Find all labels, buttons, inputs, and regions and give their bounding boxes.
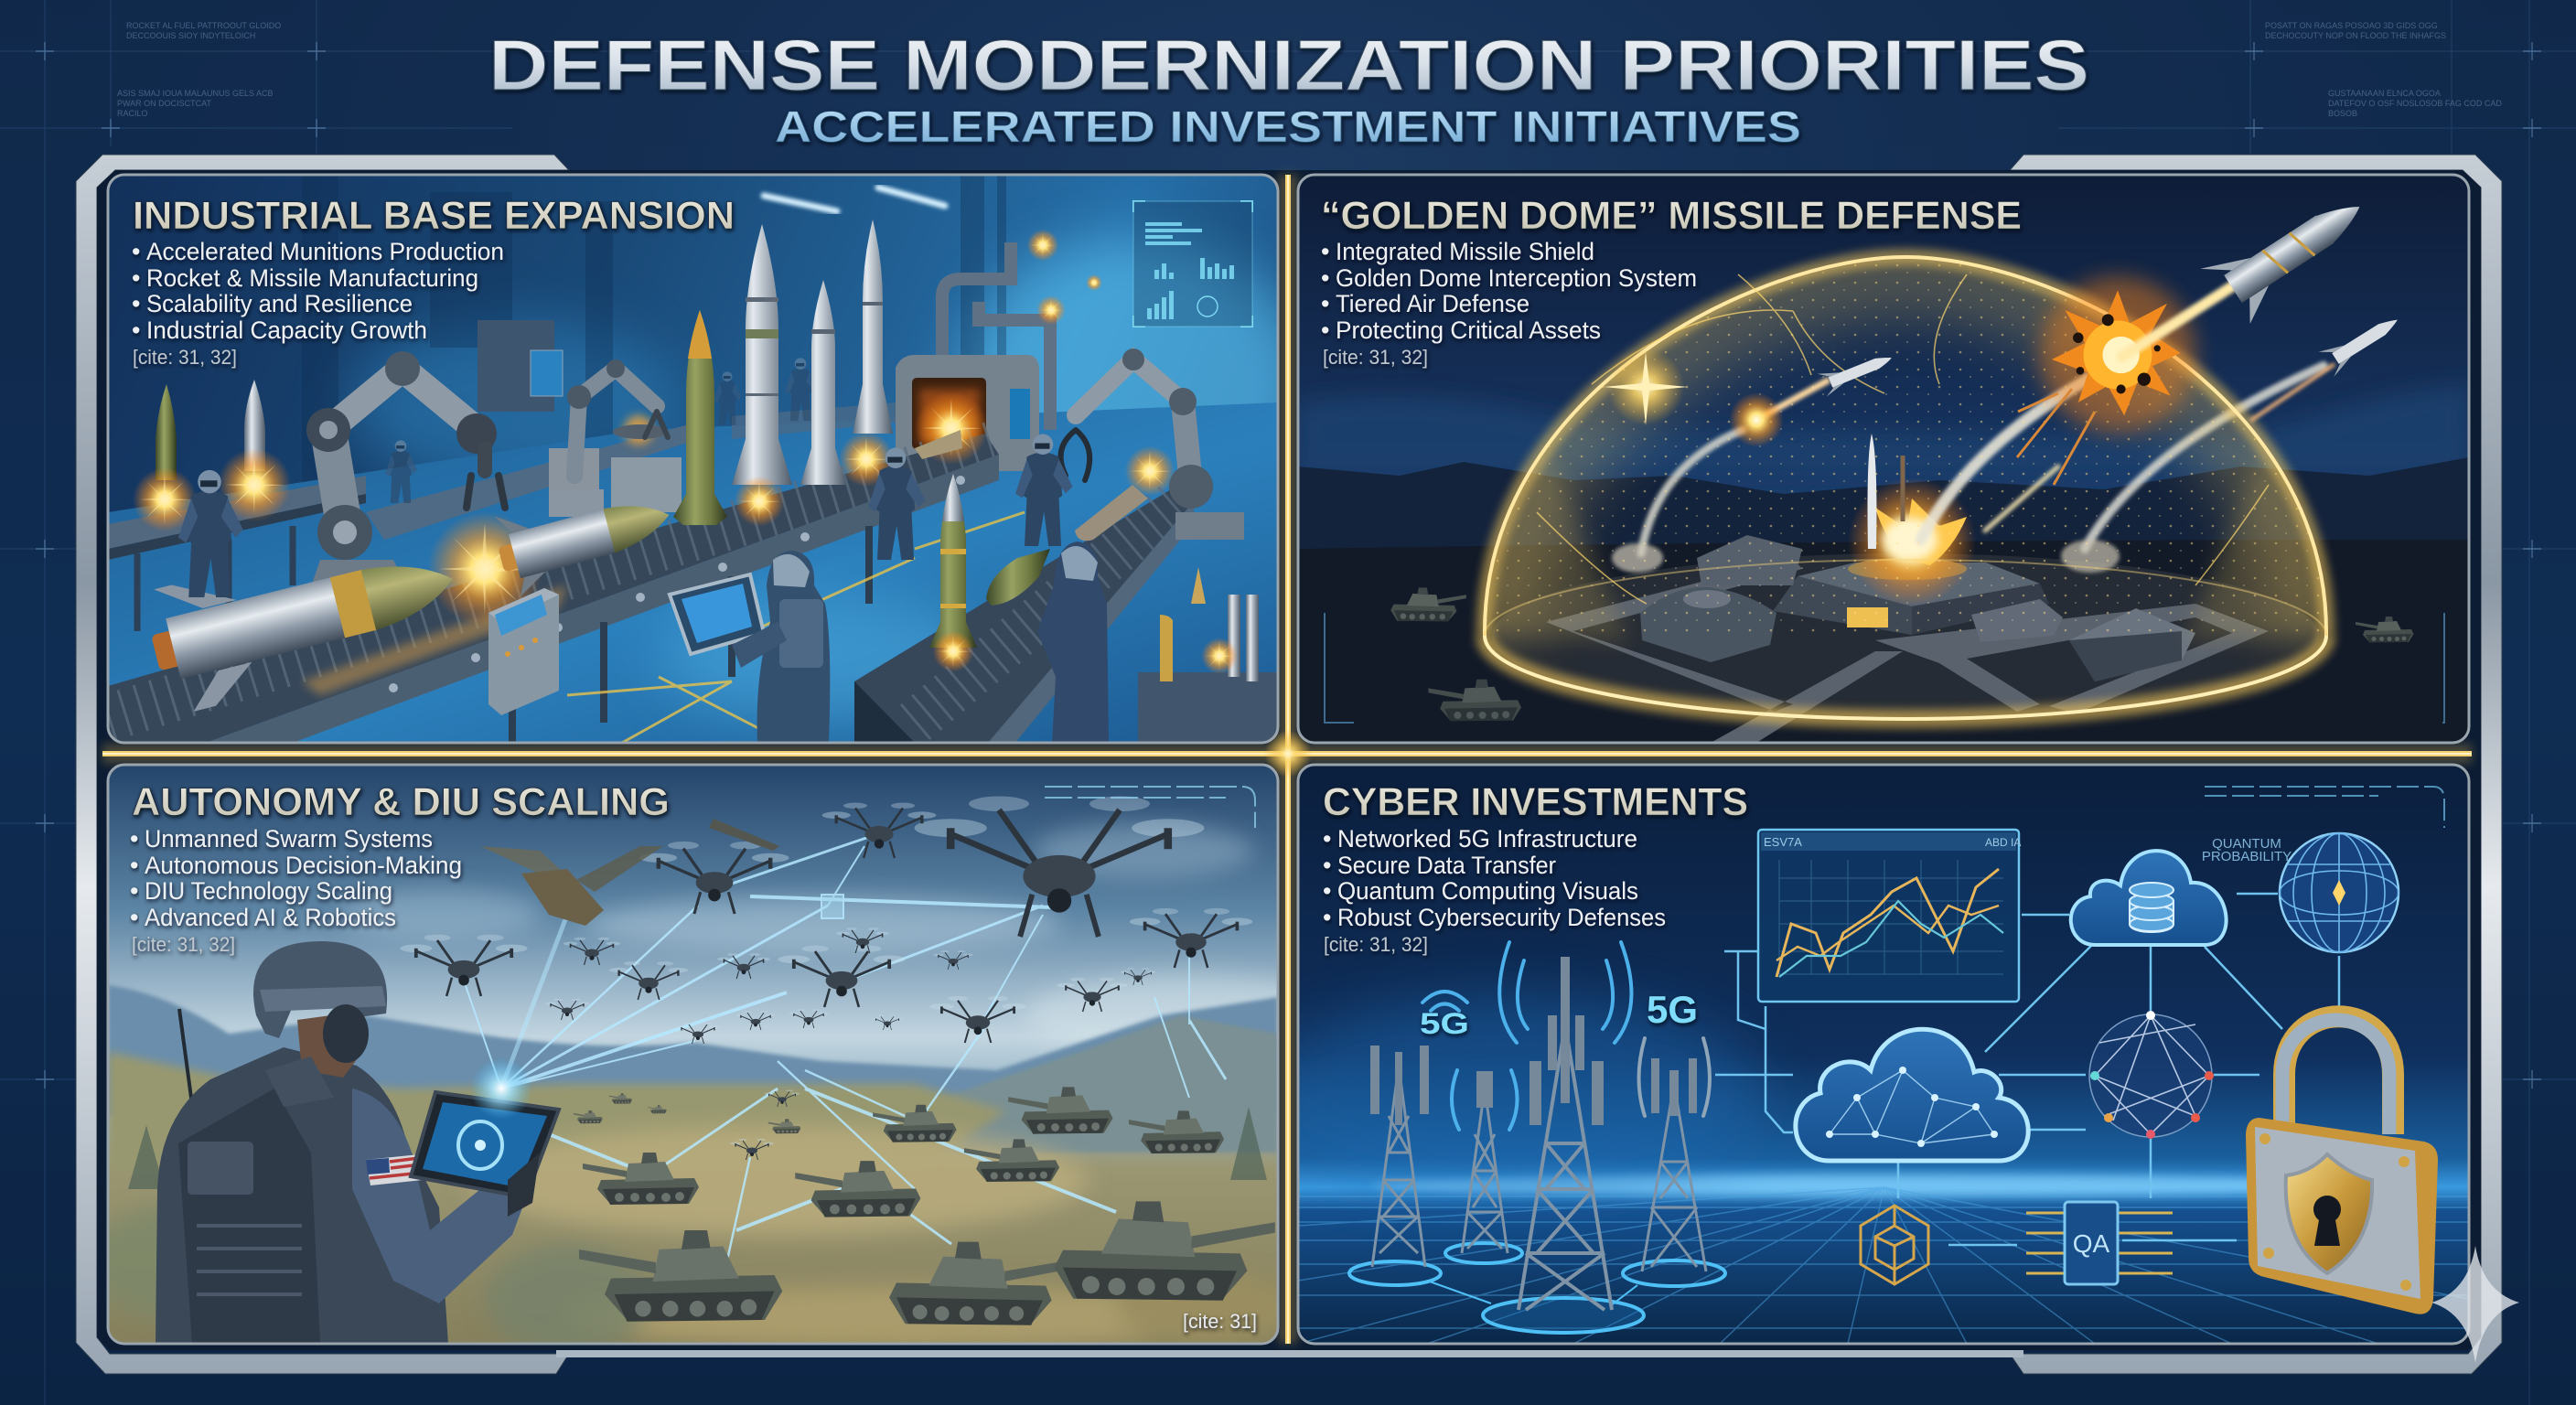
cloud: network mesh	[1796, 1029, 2028, 1161]
tablet	[411, 1092, 559, 1217]
tower antennas	[1370, 957, 1697, 1125]
hills	[1298, 457, 2469, 743]
QA chip	[2026, 1202, 2173, 1284]
bullet list	[1323, 825, 1666, 931]
citation: [cite: 31, 32]	[1324, 933, 1428, 956]
worker with tablet	[670, 551, 830, 743]
bullet list: •	[1321, 238, 1329, 265]
perspective floor grid	[1298, 1187, 2469, 1344]
bullet list: Secure Data Transfer	[1337, 852, 1556, 879]
panel: golden dome missile defense	[1298, 175, 2469, 743]
bullet list: Rocket & Missile Manufacturing	[146, 264, 478, 292]
bullet list: Scalability and Resilience	[146, 290, 413, 317]
quantum network sphere	[2089, 1011, 2214, 1139]
tower base rings	[1349, 1243, 1725, 1333]
glowing impact star	[1604, 349, 1688, 425]
HUD corners	[1325, 613, 2444, 723]
bullet list: •	[130, 904, 138, 931]
tiny technical text, top right: BOSOB	[2328, 109, 2357, 118]
bullet list: •	[130, 852, 138, 879]
bullet list	[130, 825, 462, 931]
5G labels: 5G	[1647, 988, 1698, 1031]
factory scene	[108, 174, 1308, 743]
dome	[1485, 257, 2326, 719]
bullet list: •	[132, 264, 140, 292]
background machines	[478, 320, 682, 512]
hexagon circuit icon	[1861, 1206, 1928, 1284]
panel border	[108, 175, 1278, 743]
background workers	[385, 358, 817, 503]
furnace	[896, 355, 1039, 471]
citation: [cite: 31, 32]	[132, 933, 235, 956]
pipes	[942, 242, 1050, 430]
line chart panel: ESV7A	[1764, 835, 1802, 849]
incoming missile: right	[2250, 307, 2405, 421]
shell: olive on belt	[986, 549, 1050, 606]
rockets: vertical lineup	[673, 220, 893, 525]
panel border	[1298, 175, 2469, 743]
workers	[178, 434, 1073, 597]
tiny technical text, top left: ROCKET AL FUEL PATTROOUT GLOIDO	[126, 21, 281, 30]
tiny technical text, top right: DATEFOV O OSF NOSLOSOB FAG COD CAD	[2328, 99, 2502, 108]
tiny technical text, top left: DECCOOUIS SIOY INDYTELOICH	[126, 31, 255, 40]
bullet list: •	[132, 290, 140, 317]
bullet list: Advanced AI & Robotics	[145, 904, 396, 931]
panel: autonomy and DIU scaling	[82, 765, 1354, 1354]
data links	[464, 837, 1226, 1281]
soldier	[156, 941, 526, 1344]
background shells	[156, 380, 265, 480]
tiny technical text, top right	[2265, 21, 2502, 118]
panel: industrial base expansion	[108, 174, 1308, 743]
ground patches	[82, 1125, 1299, 1354]
quantum probability globe	[2280, 833, 2399, 952]
soldier arm	[352, 1089, 526, 1303]
tiny technical text, top right: DECHOCOUTY NOP ON FLOOD THE INHAFGS	[2265, 31, 2446, 40]
5G labels	[1420, 988, 1698, 1040]
panel border	[1298, 765, 2469, 1344]
tanks	[579, 1087, 1275, 1325]
mountains	[108, 985, 1278, 1116]
heading: AUTONOMY & DIU SCALING	[132, 780, 670, 824]
bullet list: •	[132, 238, 140, 265]
bullet list: Quantum Computing Visuals	[1337, 877, 1638, 905]
icon: sparkle watermark	[2431, 1246, 2519, 1363]
conveyor: main	[108, 434, 999, 743]
bullet list: Tiered Air Defense	[1336, 290, 1530, 317]
explosion: main	[2017, 277, 2195, 485]
bullet list: Protecting Critical Assets	[1336, 316, 1601, 344]
quantum probability label	[2202, 836, 2292, 864]
panel: cyber investments	[1253, 765, 2469, 1344]
bullet list: •	[130, 877, 138, 905]
sparks and glows	[133, 229, 1175, 626]
bullet list	[1321, 238, 1697, 344]
incoming missile: small left	[1729, 346, 1896, 447]
bullet list: Accelerated Munitions Production	[146, 238, 504, 265]
tiltrotor aircraft	[480, 819, 779, 926]
robot arm: rear	[549, 359, 668, 517]
tiny technical text, top right: POSATT ON RAGAS POSOAO 3D GIDS OGG	[2265, 21, 2438, 30]
background conveyors	[108, 393, 1006, 631]
cloud: database	[2071, 851, 2227, 945]
network scene	[1253, 765, 2469, 1344]
battlefield scene	[82, 765, 1354, 1354]
line chart panel	[1758, 830, 2021, 1002]
citation: [cite: 31, 32]	[1323, 346, 1428, 369]
shell on right belt	[1075, 485, 1148, 541]
buildings	[1640, 535, 2195, 681]
link source glow	[470, 1057, 532, 1120]
gold cross divider	[102, 175, 2472, 1344]
panel border	[108, 765, 1278, 1344]
dome scene	[1298, 175, 2469, 743]
HUD display	[1133, 201, 1252, 327]
drone swarm	[400, 797, 1252, 1160]
conveyor: right	[854, 489, 1194, 743]
subtitle: ACCELERATED INVESTMENT INITIATIVES	[775, 103, 1801, 152]
distant trees	[128, 1107, 1267, 1189]
citation: bottom right: [cite: 31]	[1183, 1310, 1257, 1333]
worker: right foreground	[1037, 542, 1109, 743]
cell towers	[1372, 1024, 1706, 1310]
bullet list: •	[130, 825, 138, 853]
padlock	[2246, 1016, 2438, 1314]
ceiling lights	[764, 188, 945, 211]
clouds	[338, 823, 1354, 1056]
tiny technical text, top left: ASIS SMAJ IOUA MALAUNUS GELS ACB	[117, 89, 274, 98]
missile: second on belt	[490, 472, 680, 599]
title: DEFENSE MODERNIZATION PRIORITIES	[488, 25, 2089, 105]
floor markings	[567, 512, 1025, 743]
5G labels: 5G	[1420, 1007, 1469, 1040]
bullet list: •	[1323, 852, 1331, 879]
bullet list: Autonomous Decision-Making	[145, 852, 462, 879]
connector lines	[1715, 894, 2339, 1245]
QA chip: QA	[2073, 1229, 2110, 1258]
HUD ticks	[2205, 787, 2444, 828]
missile: large on belt	[141, 519, 468, 717]
tiny technical text, top right: GUSTAANAAN ELNCA OGOA	[2328, 89, 2441, 98]
smoke trails	[1612, 366, 2324, 573]
launch explosion	[1848, 434, 1976, 606]
bullet list: DIU Technology Scaling	[145, 877, 392, 905]
tiny technical text, top left: PWAR ON DOCISCTCAT	[117, 99, 212, 108]
bullet list: •	[1323, 825, 1331, 853]
outside vehicles	[1390, 587, 2413, 721]
quantum probability label: PROBABILITY	[2202, 849, 2292, 864]
bullet list: Robust Cybersecurity Defenses	[1337, 904, 1666, 931]
line chart panel: ABD IA	[1985, 836, 2021, 849]
base ground	[1492, 553, 2319, 718]
bullet list: •	[1323, 904, 1331, 931]
tiny technical text, top left	[117, 21, 281, 118]
bullet list: •	[1323, 877, 1331, 905]
bullet list: Industrial Capacity Growth	[146, 316, 427, 344]
tiny technical text, top left: RACILO	[117, 109, 148, 118]
bullet list: Golden Dome Interception System	[1336, 264, 1697, 292]
roads	[1546, 558, 2269, 743]
rocket: front olive	[929, 474, 977, 671]
HUD corner	[1045, 787, 1255, 828]
control box	[488, 588, 559, 715]
quantum probability label: QUANTUM	[2212, 836, 2281, 852]
bullet list: •	[1321, 316, 1329, 344]
heading: CYBER INVESTMENTS	[1323, 780, 1748, 824]
shell table	[1138, 567, 1278, 743]
heading: “GOLDEN DOME” MISSILE DEFENSE	[1321, 194, 2022, 238]
bullet list: Networked 5G Infrastructure	[1337, 825, 1637, 853]
citation: [cite: 31, 32]	[133, 346, 237, 369]
right robot arm	[1061, 349, 1244, 540]
missile in furnace	[915, 430, 962, 459]
signal arcs	[1422, 942, 1710, 1130]
soldier head	[297, 1011, 366, 1078]
bullet list: •	[1321, 264, 1329, 292]
bullet list: •	[1321, 290, 1329, 317]
distant tanks	[574, 1093, 800, 1133]
heading: INDUSTRIAL BASE EXPANSION	[133, 194, 735, 238]
bullet list	[132, 238, 504, 344]
bullet list: Integrated Missile Shield	[1336, 238, 1594, 265]
robot arm: left	[306, 351, 505, 595]
bullet list: Unmanned Swarm Systems	[145, 825, 433, 853]
bullet list: •	[132, 316, 140, 344]
incoming missile: large	[2122, 177, 2380, 357]
